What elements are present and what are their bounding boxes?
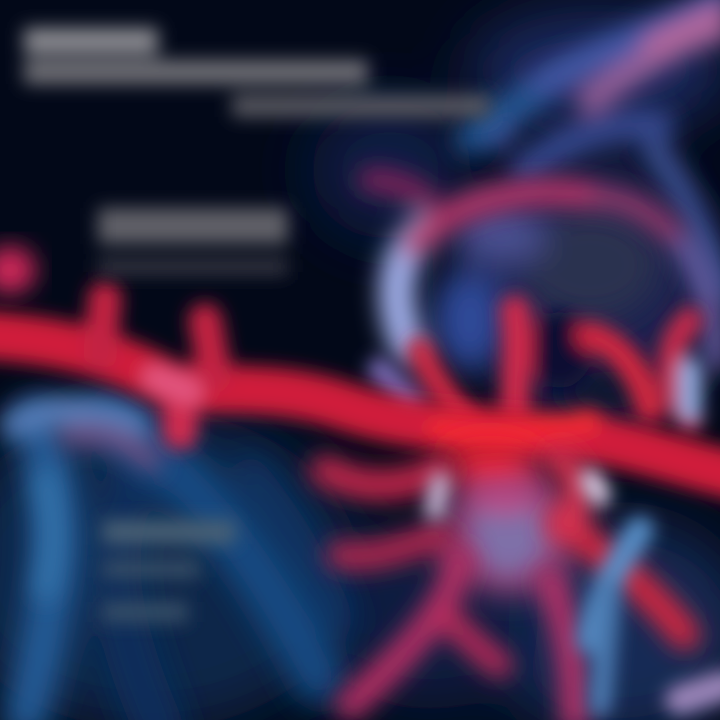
upper neuron ring (370, 180, 716, 360)
upper neuron dark centre and red branches (380, 310, 690, 420)
pink blob at left edge (0, 246, 36, 294)
main red axon (0, 298, 720, 475)
title block (illegible in reference) (24, 28, 490, 117)
lower left text block (illegible in reference) (102, 520, 236, 622)
lower neuron nucleus (470, 486, 550, 575)
lower neuron pale highlights (435, 480, 720, 705)
lower neuron body glow (440, 440, 578, 596)
lower left blue neuron branches (25, 420, 340, 720)
top right blue and pink strands (470, 0, 720, 290)
lower left periwinkle highlight (15, 410, 150, 590)
middle text block (illegible in reference) (98, 208, 288, 274)
upper neuron cell body (434, 205, 660, 420)
lower neuron red branches (325, 460, 685, 720)
